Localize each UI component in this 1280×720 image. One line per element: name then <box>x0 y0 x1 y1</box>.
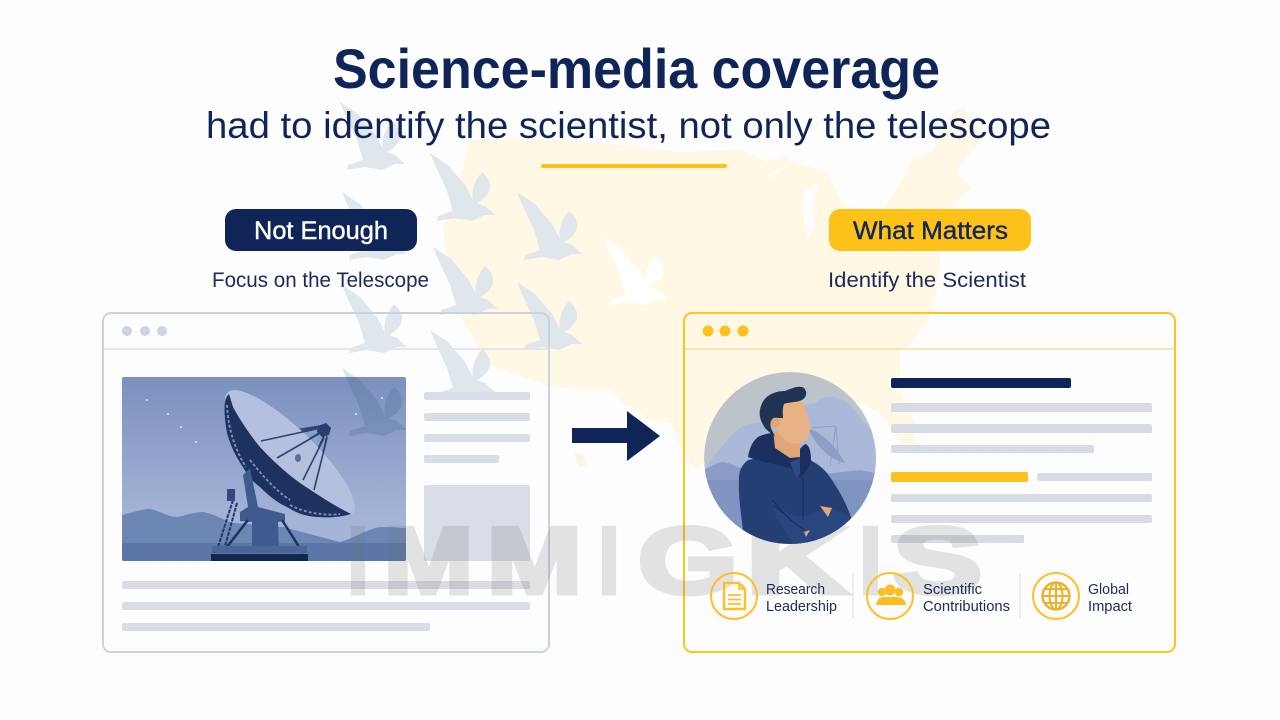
title divider <box>541 164 727 168</box>
badge: not enough: Not Enough <box>254 217 388 245</box>
article lines <box>891 378 1152 543</box>
watermark text <box>348 508 982 613</box>
item: global impact: Global <box>1088 582 1129 598</box>
caption: identify the scientist: Identify the Scientist <box>828 269 1026 292</box>
hood <box>748 433 811 478</box>
item: scientific contributions <box>867 573 1010 619</box>
icon: globe <box>1033 573 1079 619</box>
item: scientific contributions: Scientific <box>923 582 982 598</box>
watermark text: S <box>893 508 982 613</box>
item: global impact: Impact <box>1088 599 1132 615</box>
watermark text: M <box>487 508 582 613</box>
panel: not enough browser <box>103 313 549 652</box>
badge: what matters: What Matters <box>853 217 1008 245</box>
watermark text: I <box>860 508 881 613</box>
item: research leadership <box>711 573 837 619</box>
telescope image <box>122 368 407 561</box>
item: research leadership: Leadership <box>766 599 837 615</box>
watermark text: I <box>348 508 368 613</box>
icon: document <box>711 573 757 619</box>
overlay: bird over image <box>346 377 406 436</box>
background map silhouette <box>443 107 980 470</box>
arrow <box>572 411 660 461</box>
white bird <box>603 237 668 305</box>
telescope mount <box>240 468 285 553</box>
subtitle: had to identify the scientist, not only the telescope <box>206 105 1051 146</box>
watermark text: I <box>599 508 619 613</box>
dish bowl <box>225 394 351 517</box>
hair <box>760 387 806 436</box>
watermark text: M <box>384 508 473 613</box>
panel: what matters browser frame <box>684 313 1175 652</box>
watermark birds <box>340 102 582 436</box>
hoodie body <box>739 452 851 545</box>
watermark text: G <box>638 508 738 613</box>
item: research leadership: Research <box>766 582 825 598</box>
icon: people <box>867 573 913 619</box>
title: Science-media coverage <box>333 37 940 100</box>
badge: what matters <box>829 209 1031 251</box>
badge: not enough <box>225 209 417 251</box>
article side lines <box>122 392 530 631</box>
caption: focus on the telescope: Focus on the Telescope <box>212 269 429 292</box>
item: scientific contributions: Contributions <box>923 599 1010 615</box>
scientist portrait <box>704 372 880 550</box>
watermark text: K <box>746 508 847 613</box>
neck and face <box>773 430 800 458</box>
crossed arms <box>772 500 850 545</box>
item: global impact <box>1033 573 1132 619</box>
background dish <box>808 428 845 463</box>
feed struts <box>299 425 328 452</box>
